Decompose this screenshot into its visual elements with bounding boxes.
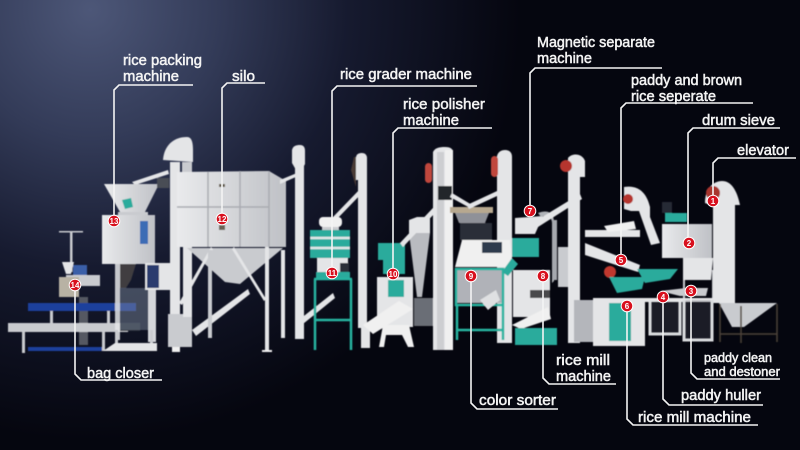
label: rice mill machine (8): [556, 353, 611, 385]
label: elevator: elevator: [737, 143, 789, 159]
machine: rice packing machine: [102, 170, 170, 351]
numbered markers: 1: [711, 197, 716, 206]
machine: magnetic separator and rice mill: [502, 212, 557, 345]
machine: central cone and elevators: [400, 147, 512, 350]
label: paddy and brown rice seperate: paddy and brown: [631, 73, 742, 89]
machine: rice grader: [310, 217, 352, 350]
label: magnetic separate machine: Magnetic separate: [537, 35, 655, 51]
label: rice packing machine: rice packing: [123, 53, 202, 69]
machine: elevator and paddy separator: [534, 155, 678, 346]
label: paddy huller: paddy huller: [681, 388, 761, 404]
machine: silo with elevator: [157, 137, 286, 352]
machine group: [8, 137, 777, 353]
label: rice polisher machine: machine: [403, 113, 459, 129]
machine: rice polisher: [363, 243, 414, 347]
machine: elevators between silo and grader: [280, 145, 370, 348]
label: rice polisher machine: [403, 97, 485, 129]
numbered markers: 11: [328, 269, 337, 278]
numbered markers: 4: [661, 293, 666, 302]
machine: color sorter: [455, 240, 513, 340]
label: rice mill machine (8): machine: [556, 369, 611, 385]
label: paddy clean and destoner: and destoner: [704, 365, 780, 379]
numbered markers: 6: [625, 302, 630, 311]
numbered markers: 3: [689, 287, 694, 296]
numbered markers: 13: [110, 217, 119, 226]
label: paddy and brown rice seperate: rice seperate: [631, 89, 716, 105]
machine: bag closer: [8, 231, 140, 353]
numbered markers: 14: [71, 281, 80, 290]
label: color sorter: color sorter: [479, 393, 556, 409]
numbered markers: 8: [541, 272, 546, 281]
numbered markers: 12: [218, 215, 227, 224]
numbered markers: [69, 195, 719, 312]
label: rice packing machine: [123, 53, 202, 85]
numbered markers: 5: [619, 256, 624, 265]
numbered markers: 2: [687, 239, 692, 248]
label: rice packing machine: machine: [123, 69, 179, 85]
label: paddy clean and destoner: [704, 351, 780, 379]
label: paddy clean and destoner: paddy clean: [704, 351, 772, 365]
label: rice polisher machine: rice polisher: [403, 97, 485, 113]
label: rice mill machine (6): rice mill machine: [638, 410, 751, 426]
numbered markers: 10: [389, 270, 398, 279]
label: magnetic separate machine: machine: [537, 51, 592, 67]
numbered markers: 7: [528, 207, 533, 216]
label: magnetic separate machine: [537, 35, 655, 67]
label: rice grader machine: rice grader machine: [340, 67, 472, 83]
label: drum sieve: drum sieve: [702, 113, 775, 129]
numbered markers: 9: [469, 272, 474, 281]
leader lines: [75, 68, 796, 425]
machine: drum sieve and right elevator: [645, 181, 777, 343]
label: bag closer: bag closer: [87, 366, 154, 382]
label: silo: silo: [232, 69, 255, 85]
label: paddy and brown rice seperate: [631, 73, 742, 105]
label: rice mill machine (8): rice mill: [556, 353, 610, 369]
